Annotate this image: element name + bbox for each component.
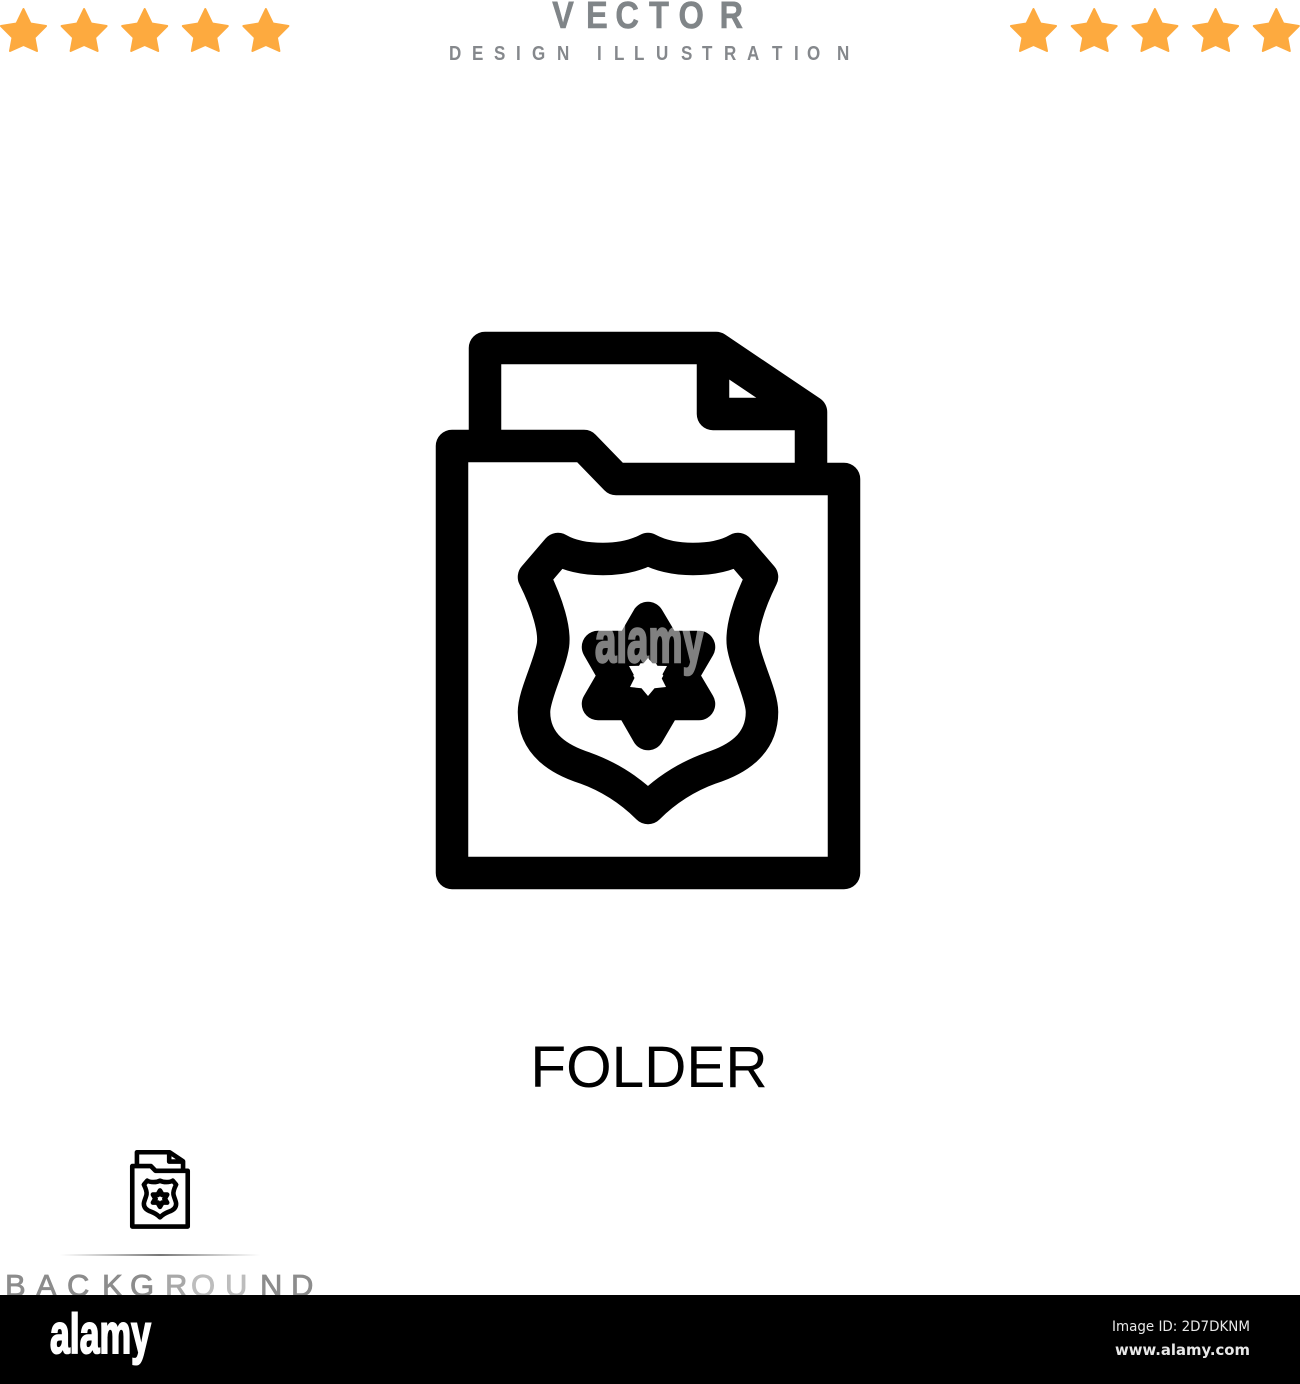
small icon: police folder [132, 1152, 188, 1227]
footer website: www.alamy.com [1115, 1341, 1250, 1359]
footer band [0, 1295, 1300, 1384]
footer logo: alamy: alamy [50, 1302, 151, 1365]
subheading: design illustration: DESIGN ILLUSTRATION [449, 42, 849, 64]
star of david [598, 618, 699, 734]
shield badge [534, 549, 762, 808]
folder [452, 446, 844, 873]
label: background: BACKG RO U ND [5, 1268, 313, 1303]
main icon: police folder [452, 348, 844, 873]
paper sheet [485, 348, 811, 470]
watermark: alamy [595, 607, 704, 676]
divider line [60, 1254, 260, 1256]
left star rating [1, 9, 288, 51]
footer image id: Image ID: 2D7DKNM [1112, 1319, 1250, 1335]
right star rating [1011, 9, 1299, 51]
label: folder: FOLDER [530, 1035, 768, 1100]
